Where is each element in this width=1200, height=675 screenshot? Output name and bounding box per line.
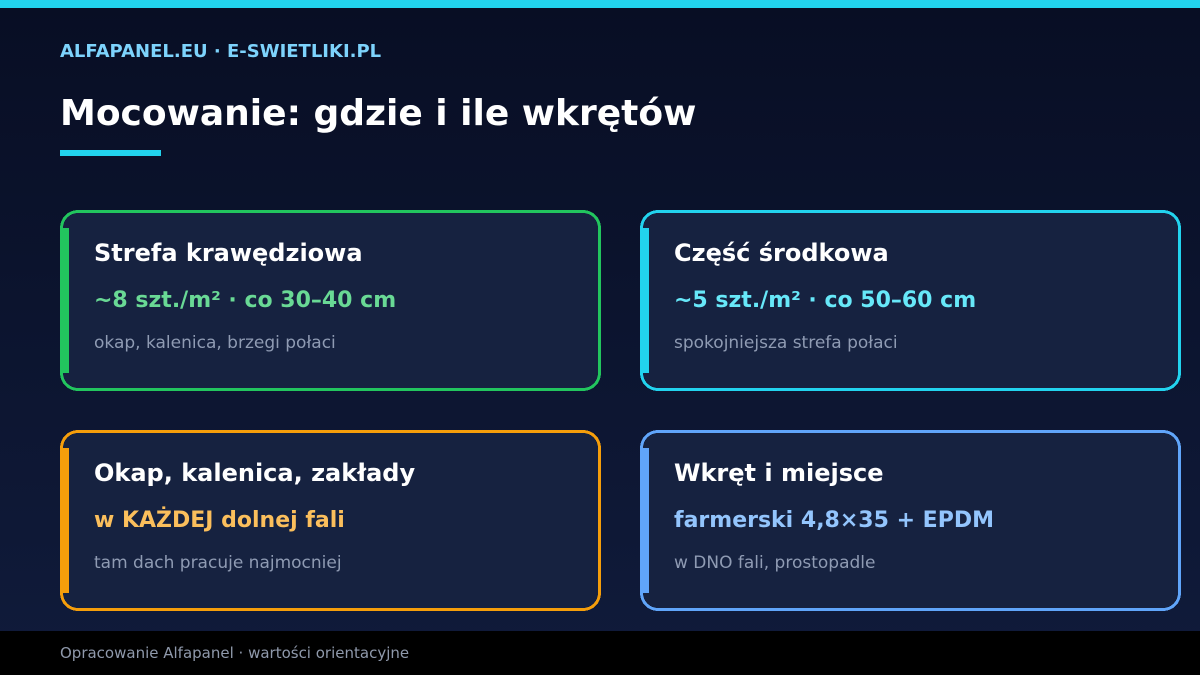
title underline: [60, 150, 161, 156]
heading: edge zone: Strefa krawędziowa: [94, 239, 363, 267]
title: Mocowanie: gdzie i ile wkrętów: [60, 93, 696, 134]
panel: eaves, ridge, laps: [60, 430, 601, 611]
note: screw: w DNO fali, prostopadle: [674, 553, 875, 573]
panel accent: middle part: [640, 228, 649, 373]
panel accent: screw: [640, 448, 649, 593]
note: eaves: tam dach pracuje najmocniej: [94, 553, 342, 573]
heading: eaves: Okap, kalenica, zakłady: [94, 459, 415, 487]
heading: screw: Wkręt i miejsce: [674, 459, 883, 487]
panel accent: edge zone: [60, 228, 69, 373]
value: eaves: w KAŻDEJ dolnej fali: [94, 507, 345, 533]
note: edge zone: okap, kalenica, brzegi połaci: [94, 333, 336, 353]
value: screw: farmerski 4,8×35 + EPDM: [674, 508, 994, 533]
panel: middle part: [640, 210, 1181, 391]
brand line: ALFAPANEL.EU · E-SWIETLIKI.PL: [60, 41, 381, 62]
heading: middle part: Część środkowa: [674, 239, 889, 267]
footer bar: [0, 631, 1200, 675]
note: middle part: spokojniejsza strefa połaci: [674, 333, 898, 353]
panel: screw and place: [640, 430, 1181, 611]
footer text: Opracowanie Alfapanel · wartości orientacyjne: [60, 644, 409, 662]
value: middle part: ~5 szt./m² · co 50–60 cm: [674, 288, 976, 313]
value: edge zone: ~8 szt./m² · co 30–40 cm: [94, 288, 396, 313]
panel: edge zone: [60, 210, 601, 391]
panel accent: eaves: [60, 448, 69, 593]
top accent bar: [0, 0, 1200, 8]
